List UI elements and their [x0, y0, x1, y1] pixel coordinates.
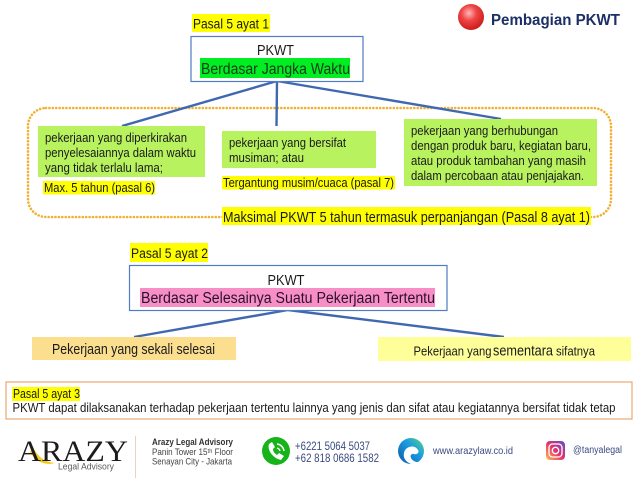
connector lines from first PKWT box: [122, 81, 501, 126]
address block: Senayan City - Jakarta: [152, 456, 232, 466]
icon: website globe: [398, 438, 424, 465]
label: Pasal 5 ayat 1: Pasal 5 ayat 1: [193, 16, 269, 32]
panel: pekerjaan sekali selesai: Pekerjaan yang sekali selesai: [52, 342, 215, 358]
panel: pekerjaan produk baru: dengan produk baru, kegiatan baru,: [411, 139, 591, 153]
panel: pekerjaan diperkirakan: yang tidak terlalu lama;: [45, 161, 163, 175]
panel: pekerjaan sementara: sementara: [493, 344, 554, 360]
box: PKWT berdasar jangka waktu: [191, 36, 363, 82]
connector lines from second PKWT box: [134, 310, 504, 337]
panel: pekerjaan sementara: Pekerjaan yang: [414, 344, 492, 358]
panel: pekerjaan diperkirakan: penyelesaiannya dalam waktu: [45, 146, 196, 160]
divider: [135, 436, 136, 478]
panel: pekerjaan sementara: sifatnya: [556, 344, 595, 358]
label: Tergantung musim: Tergantung musim/cuaca (pasal 7): [223, 176, 394, 190]
panel: Pasal 5 ayat 3: Pasal 5 ayat 3: [13, 387, 80, 401]
address block: Arazy Legal Advisory: [152, 437, 233, 447]
panel: pekerjaan produk baru: pekerjaan yang berhubungan: [411, 124, 558, 138]
panel: pekerjaan diperkirakan: [38, 126, 205, 177]
icon: phone: [262, 437, 290, 465]
title: Pembagian PKWT: [458, 4, 620, 30]
panel: pekerjaan sementara: [378, 337, 631, 361]
title: Pembagian PKWT: Pembagian PKWT: [491, 12, 620, 29]
panel: pekerjaan sekali selesai: [32, 337, 236, 360]
logo: Arazy Legal Advisory: ARAZY: [18, 435, 128, 468]
box: PKWT berdasar jangka waktu: Berdasar Jangka Waktu: [201, 61, 350, 78]
panel: pekerjaan produk baru: atau produk tambahan yang masih: [411, 154, 586, 168]
logo: Arazy Legal Advisory: Legal Advisory: [58, 462, 114, 472]
panel: Pasal 5 ayat 3: [6, 382, 632, 419]
panel: pekerjaan produk baru: dalam percobaan atau penjajakan.: [411, 169, 584, 183]
phone numbers: +62 818 0686 1582: [295, 453, 379, 465]
panel: pekerjaan musiman: [222, 131, 376, 168]
address block: [152, 437, 233, 466]
phone numbers: +6221 5064 5037: [295, 441, 370, 453]
label: Pasal 5 ayat 2: Pasal 5 ayat 2: [131, 246, 208, 261]
panel: pekerjaan produk baru: [404, 119, 597, 186]
box: PKWT berdasar selesainya pekerjaan: [130, 266, 447, 310]
instagram handle: @tanyalegal: [573, 445, 622, 456]
website address: www.arazylaw.co.id: [432, 445, 513, 457]
label: Max. 5 tahun: Max. 5 tahun (pasal 6): [44, 181, 155, 195]
callout: Maksimal PKWT 5 tahun: Maksimal PKWT 5 tahun termasuk perpanjangan (Pasal 8 ayat 1): [223, 210, 590, 226]
box: PKWT berdasar selesainya pekerjaan: PKWT: [268, 272, 304, 289]
box: PKWT berdasar selesainya pekerjaan: Berdasar Selesainya Suatu Pekerjaan Tertentu: [141, 290, 435, 307]
box: PKWT berdasar jangka waktu: PKWT: [257, 42, 294, 59]
panel: pekerjaan diperkirakan: pekerjaan yang diperkirakan: [45, 131, 187, 145]
address block: Panin Tower 15ᵗʰ Floor: [152, 447, 233, 457]
phone numbers: [295, 441, 379, 465]
dotted group frame: [28, 108, 611, 217]
panel: pekerjaan musiman: pekerjaan yang bersifat: [229, 136, 346, 150]
icon: instagram: [546, 441, 565, 460]
panel: pekerjaan musiman: musiman; atau: [229, 151, 304, 165]
